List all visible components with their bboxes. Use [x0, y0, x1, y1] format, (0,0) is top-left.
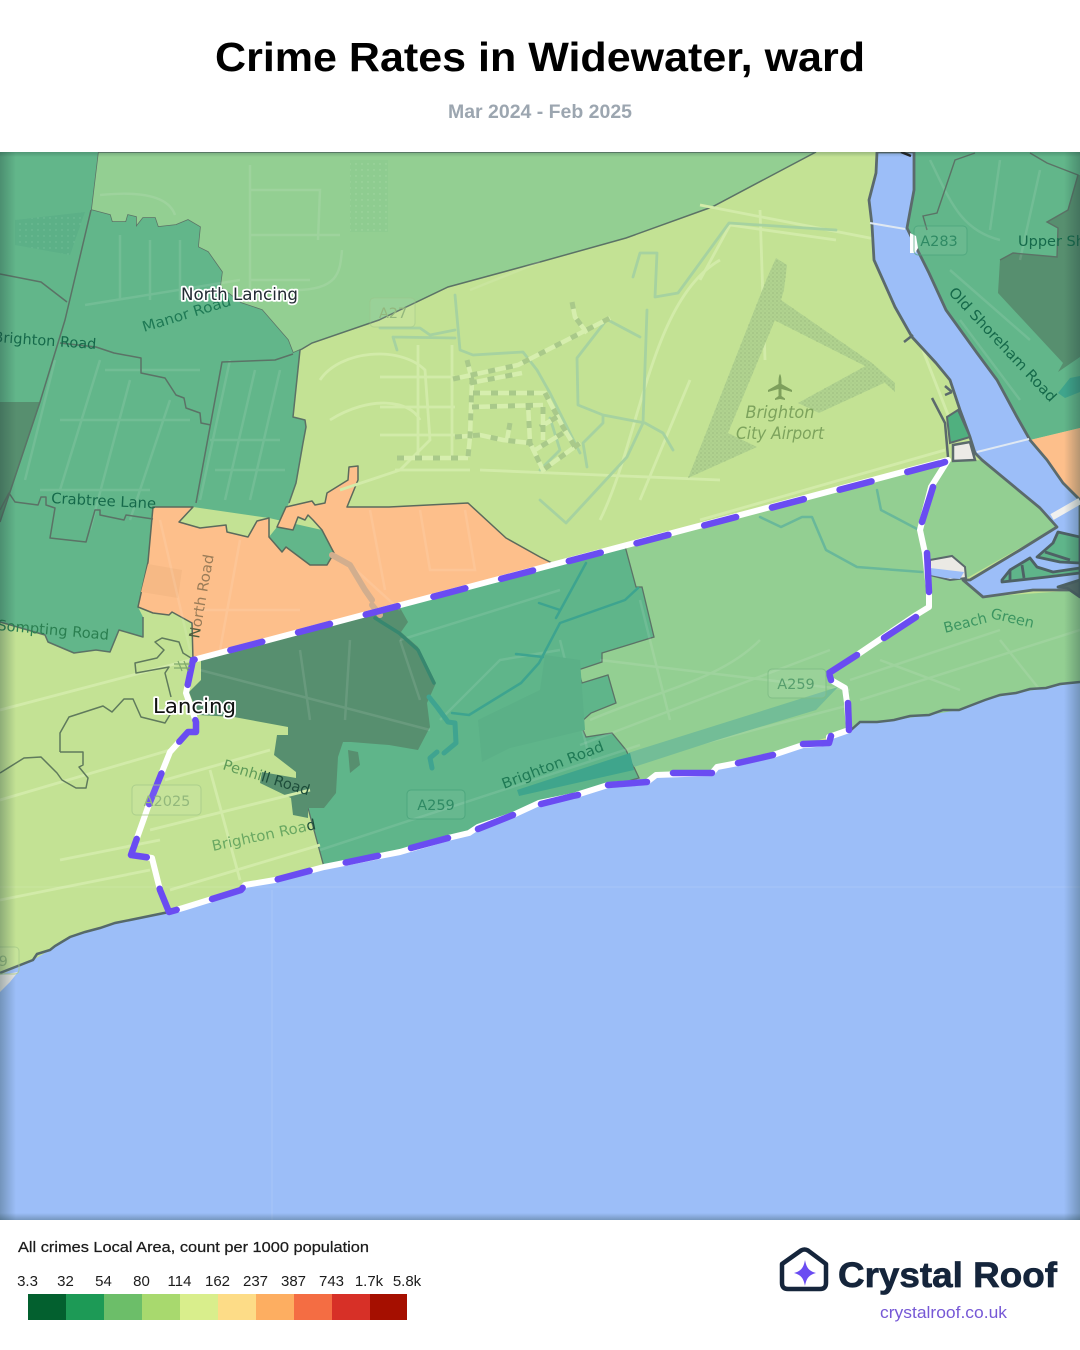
zone: small dark green patch	[348, 750, 360, 773]
zone: widewater east mid-light green	[560, 460, 1080, 795]
ward boundary: purple dash at NE corner	[939, 462, 945, 464]
ward boundary: purple dashes coast and east edge	[411, 487, 933, 848]
boundary lines west	[0, 210, 306, 653]
map panel	[0, 152, 1080, 1220]
streams: airport zone	[380, 223, 836, 523]
legend tick labels: 162	[205, 1273, 230, 1290]
label: Brighton City Airport	[736, 403, 824, 443]
shoreham road bridge	[1052, 501, 1080, 517]
road shield: A259 central: A259	[417, 798, 455, 814]
west bank white patch	[910, 233, 918, 253]
estuary islands	[1002, 532, 1080, 597]
title: Crime Rates in Widewater, ward	[215, 34, 865, 80]
road shield: A259 east: A259	[777, 677, 815, 693]
legend tick labels: 32	[57, 1273, 74, 1290]
road shield: A283	[914, 226, 967, 255]
lagoon water	[930, 568, 964, 579]
legend tick labels: 1.7k	[355, 1273, 384, 1290]
zone: dark green west	[0, 402, 40, 522]
icon: purple sparkle	[794, 1260, 816, 1286]
shoreline white patch	[0, 972, 18, 992]
legend colour scale	[28, 1294, 407, 1320]
icon: airplane	[768, 374, 792, 400]
darker central park	[563, 658, 585, 731]
light roads: airport zone and lancing	[0, 205, 950, 900]
harbour white patch	[953, 442, 975, 461]
legend tick labels: 237	[243, 1273, 268, 1290]
top river marker	[901, 152, 911, 156]
legend tick labels: 743	[319, 1273, 344, 1290]
icon: rail station	[174, 661, 190, 671]
wordmark: Crystal Roof	[838, 1256, 1057, 1295]
map inner shadow	[0, 152, 1080, 1220]
village street grid	[397, 302, 610, 470]
zone: western mid green	[0, 152, 334, 653]
village grid: darker dashes	[397, 302, 610, 470]
faint road network	[25, 160, 1080, 850]
legend tick labels	[17, 1273, 422, 1290]
orange zone muted stream	[332, 555, 380, 615]
label: Brighton Road central: Brighton Road	[500, 739, 606, 793]
label: Old Shoreham Road: Old Shoreham Road	[945, 285, 1059, 405]
teal fragment	[1058, 376, 1080, 398]
legend tick labels: 80	[133, 1273, 150, 1290]
zone: east bank mid green	[907, 152, 1080, 440]
legend tick labels: 54	[95, 1273, 112, 1290]
road shield: A259 far west	[0, 947, 19, 974]
sea	[0, 682, 1080, 1220]
icon: house outline	[782, 1250, 826, 1289]
zone: east bank orange	[1030, 428, 1080, 500]
ward boundary: purple dashes west edge	[131, 660, 382, 912]
stream: lancing brook	[429, 697, 456, 768]
harbour land details	[904, 335, 952, 457]
label: Lancing: Lancing	[153, 694, 236, 718]
label: Brighton City Airport: City Airport	[736, 424, 824, 443]
zone: widewater dark green	[189, 606, 436, 818]
label: Penhill Road: Penhill Road	[221, 758, 312, 799]
streams: widewater east	[760, 490, 922, 572]
boundary lines east bank	[923, 153, 1078, 260]
legend tick labels: 3.3	[17, 1273, 38, 1290]
legend tick labels: 114	[168, 1273, 191, 1290]
river adur	[869, 152, 1080, 597]
label: North Road: North Road	[187, 553, 218, 640]
harbour green patch	[947, 410, 970, 443]
label: Brighton Road south: Brighton Road	[211, 817, 318, 855]
legend	[17, 1239, 422, 1320]
road shield: A259 central	[407, 790, 465, 819]
stream: central ward	[452, 563, 638, 715]
subtitle: date range: Mar 2024 - Feb 2025	[448, 102, 632, 123]
beach strip: east section	[628, 687, 838, 767]
label: Brighton City Airport: Brighton	[746, 403, 814, 422]
legend tick labels: 387	[281, 1273, 306, 1290]
road shield: A27	[370, 298, 415, 327]
airport runways	[688, 258, 895, 478]
legend title: All crimes Local Area, count per 1000 population	[18, 1239, 369, 1256]
land base: light green zone	[0, 152, 1080, 975]
village grid: pale streets	[397, 302, 610, 470]
river bridges	[870, 223, 1029, 452]
zone: east bank dark green	[998, 175, 1080, 372]
estuary lagoon sand	[930, 556, 966, 580]
dotted woodland north	[350, 164, 386, 230]
boundary lines lancing	[0, 638, 191, 788]
zone: widewater central mid green	[308, 546, 654, 867]
orange zone sports ground	[141, 564, 148, 592]
dotted woodland west	[20, 218, 80, 254]
label: North Lancing: North Lancing	[181, 285, 298, 304]
label: Crabtree Lane: Crabtree Lane	[51, 491, 157, 512]
sea tile seams	[0, 887, 1080, 1220]
beach strip: central section	[517, 753, 634, 796]
logo: Crystal Roof	[782, 1250, 1057, 1322]
coast outline	[0, 682, 1080, 973]
ward boundary: white casing	[131, 460, 948, 912]
label: Beach Green second word: Green	[989, 606, 1036, 632]
legend tick labels: 5.8k	[393, 1273, 422, 1290]
label: Manor Road: Manor Road	[140, 294, 233, 336]
zone: north lancing mid-light green	[91, 152, 816, 353]
road shield: A283: A283	[920, 234, 958, 250]
ward boundary: purple dashes north edge	[193, 462, 945, 660]
road shield: A2025: A2025	[144, 794, 190, 810]
water courses	[332, 223, 922, 768]
label: Beach Green: Beach	[942, 611, 989, 637]
road shield: A2025	[132, 785, 201, 815]
zone: orange high crime area	[138, 466, 552, 660]
stream: dark teal beside dark ward	[375, 618, 434, 683]
road shield: A259 east	[768, 669, 826, 698]
website: crystalroof.co.uk	[880, 1304, 1008, 1322]
road shield: A27: A27	[379, 306, 407, 322]
